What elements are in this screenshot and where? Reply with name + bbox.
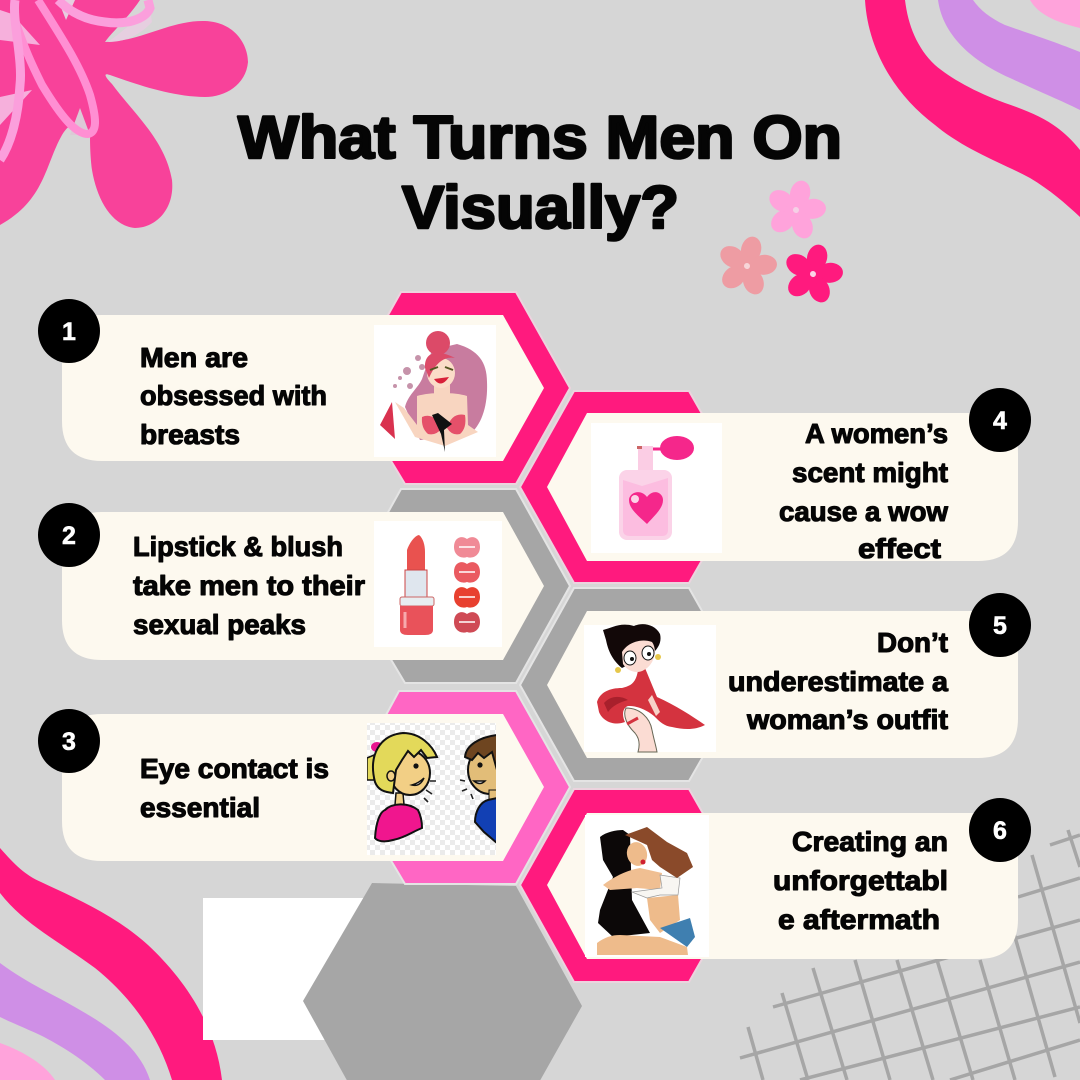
hexagon 6 xyxy=(520,789,744,982)
text 3 xyxy=(140,753,329,823)
image 4: perfume bottle xyxy=(591,423,722,553)
flower: light pink xyxy=(758,173,834,247)
card 6 xyxy=(547,813,1018,959)
card 2 xyxy=(62,512,544,660)
card 3 xyxy=(62,714,544,861)
hexagon 1 xyxy=(347,292,570,484)
text 6 xyxy=(773,826,948,935)
title: What Turns Men On xyxy=(238,104,842,171)
image 3: two people talking xyxy=(367,723,496,855)
gray hexagon bottom xyxy=(303,883,582,1080)
text 2 xyxy=(133,531,365,640)
badge 5 xyxy=(969,593,1031,657)
text 4 xyxy=(779,418,949,564)
flower: hot pink xyxy=(775,237,851,311)
title xyxy=(238,104,842,241)
panel 3: eye contact xyxy=(38,691,570,884)
text 3: essential xyxy=(140,792,260,823)
text 5 xyxy=(728,627,949,735)
decorative waves bottom left xyxy=(0,848,222,1080)
panel 5: outfit xyxy=(520,588,1031,781)
image 6: embracing couple xyxy=(585,815,709,957)
text 1 xyxy=(140,342,327,450)
image 1: woman illustration xyxy=(374,325,496,457)
flower: salmon xyxy=(709,229,785,303)
card 5 xyxy=(547,611,1018,758)
decorative splash top left xyxy=(0,0,248,228)
badge 2: 2 xyxy=(62,522,76,550)
card 4 xyxy=(547,413,1018,561)
badge 3 xyxy=(38,709,100,773)
text 2: Lipstick & blush xyxy=(133,531,343,562)
kisses xyxy=(454,537,480,633)
text 5: Don’t xyxy=(877,627,948,658)
text 1: obsessed with xyxy=(140,380,327,411)
badge 1: 1 xyxy=(62,318,76,346)
text 5: woman’s outfit xyxy=(746,704,948,735)
image 2: lipstick and kisses xyxy=(374,521,502,647)
text 2: take men to their xyxy=(133,570,365,601)
panel 2: lipstick xyxy=(38,489,570,683)
badge 3: 3 xyxy=(62,728,76,756)
flowers xyxy=(709,173,851,311)
card 1 xyxy=(62,315,544,461)
text 6: unforgettabl xyxy=(773,865,948,896)
text 4: cause a wow xyxy=(779,496,949,527)
text 2: sexual peaks xyxy=(133,609,306,640)
hexagon 3 xyxy=(347,691,570,884)
badge 6: 6 xyxy=(993,817,1007,845)
text 1: Men are xyxy=(140,342,248,373)
text 4: effect xyxy=(858,533,941,564)
text 5: underestimate a xyxy=(728,666,949,697)
white square bottom xyxy=(203,898,403,1040)
text 1: breasts xyxy=(140,419,240,450)
hexagon 2 xyxy=(347,489,570,683)
text 6: Creating an xyxy=(792,826,948,857)
badge 4: 4 xyxy=(993,407,1007,435)
badge 5: 5 xyxy=(993,612,1007,640)
hexagon 4 xyxy=(520,391,744,583)
panel 4: scent xyxy=(520,388,1031,583)
decorative grid bottom right xyxy=(740,830,1080,1080)
badge 4 xyxy=(969,388,1031,452)
badge 2 xyxy=(38,503,100,567)
image 5: cartoon woman in red dress xyxy=(584,624,716,752)
text 4: scent might xyxy=(792,457,948,488)
text 3: Eye contact is xyxy=(140,753,329,784)
text 4: A women’s xyxy=(805,418,948,449)
panel 1: breasts xyxy=(38,292,570,484)
badge 1 xyxy=(38,299,100,363)
text 6: e aftermath xyxy=(778,904,940,935)
badge 6 xyxy=(969,798,1031,862)
panel 6: aftermath xyxy=(520,789,1031,982)
title: Visually? xyxy=(402,174,679,241)
decorative waves top right xyxy=(865,0,1080,217)
hexagon 5 xyxy=(520,588,744,781)
